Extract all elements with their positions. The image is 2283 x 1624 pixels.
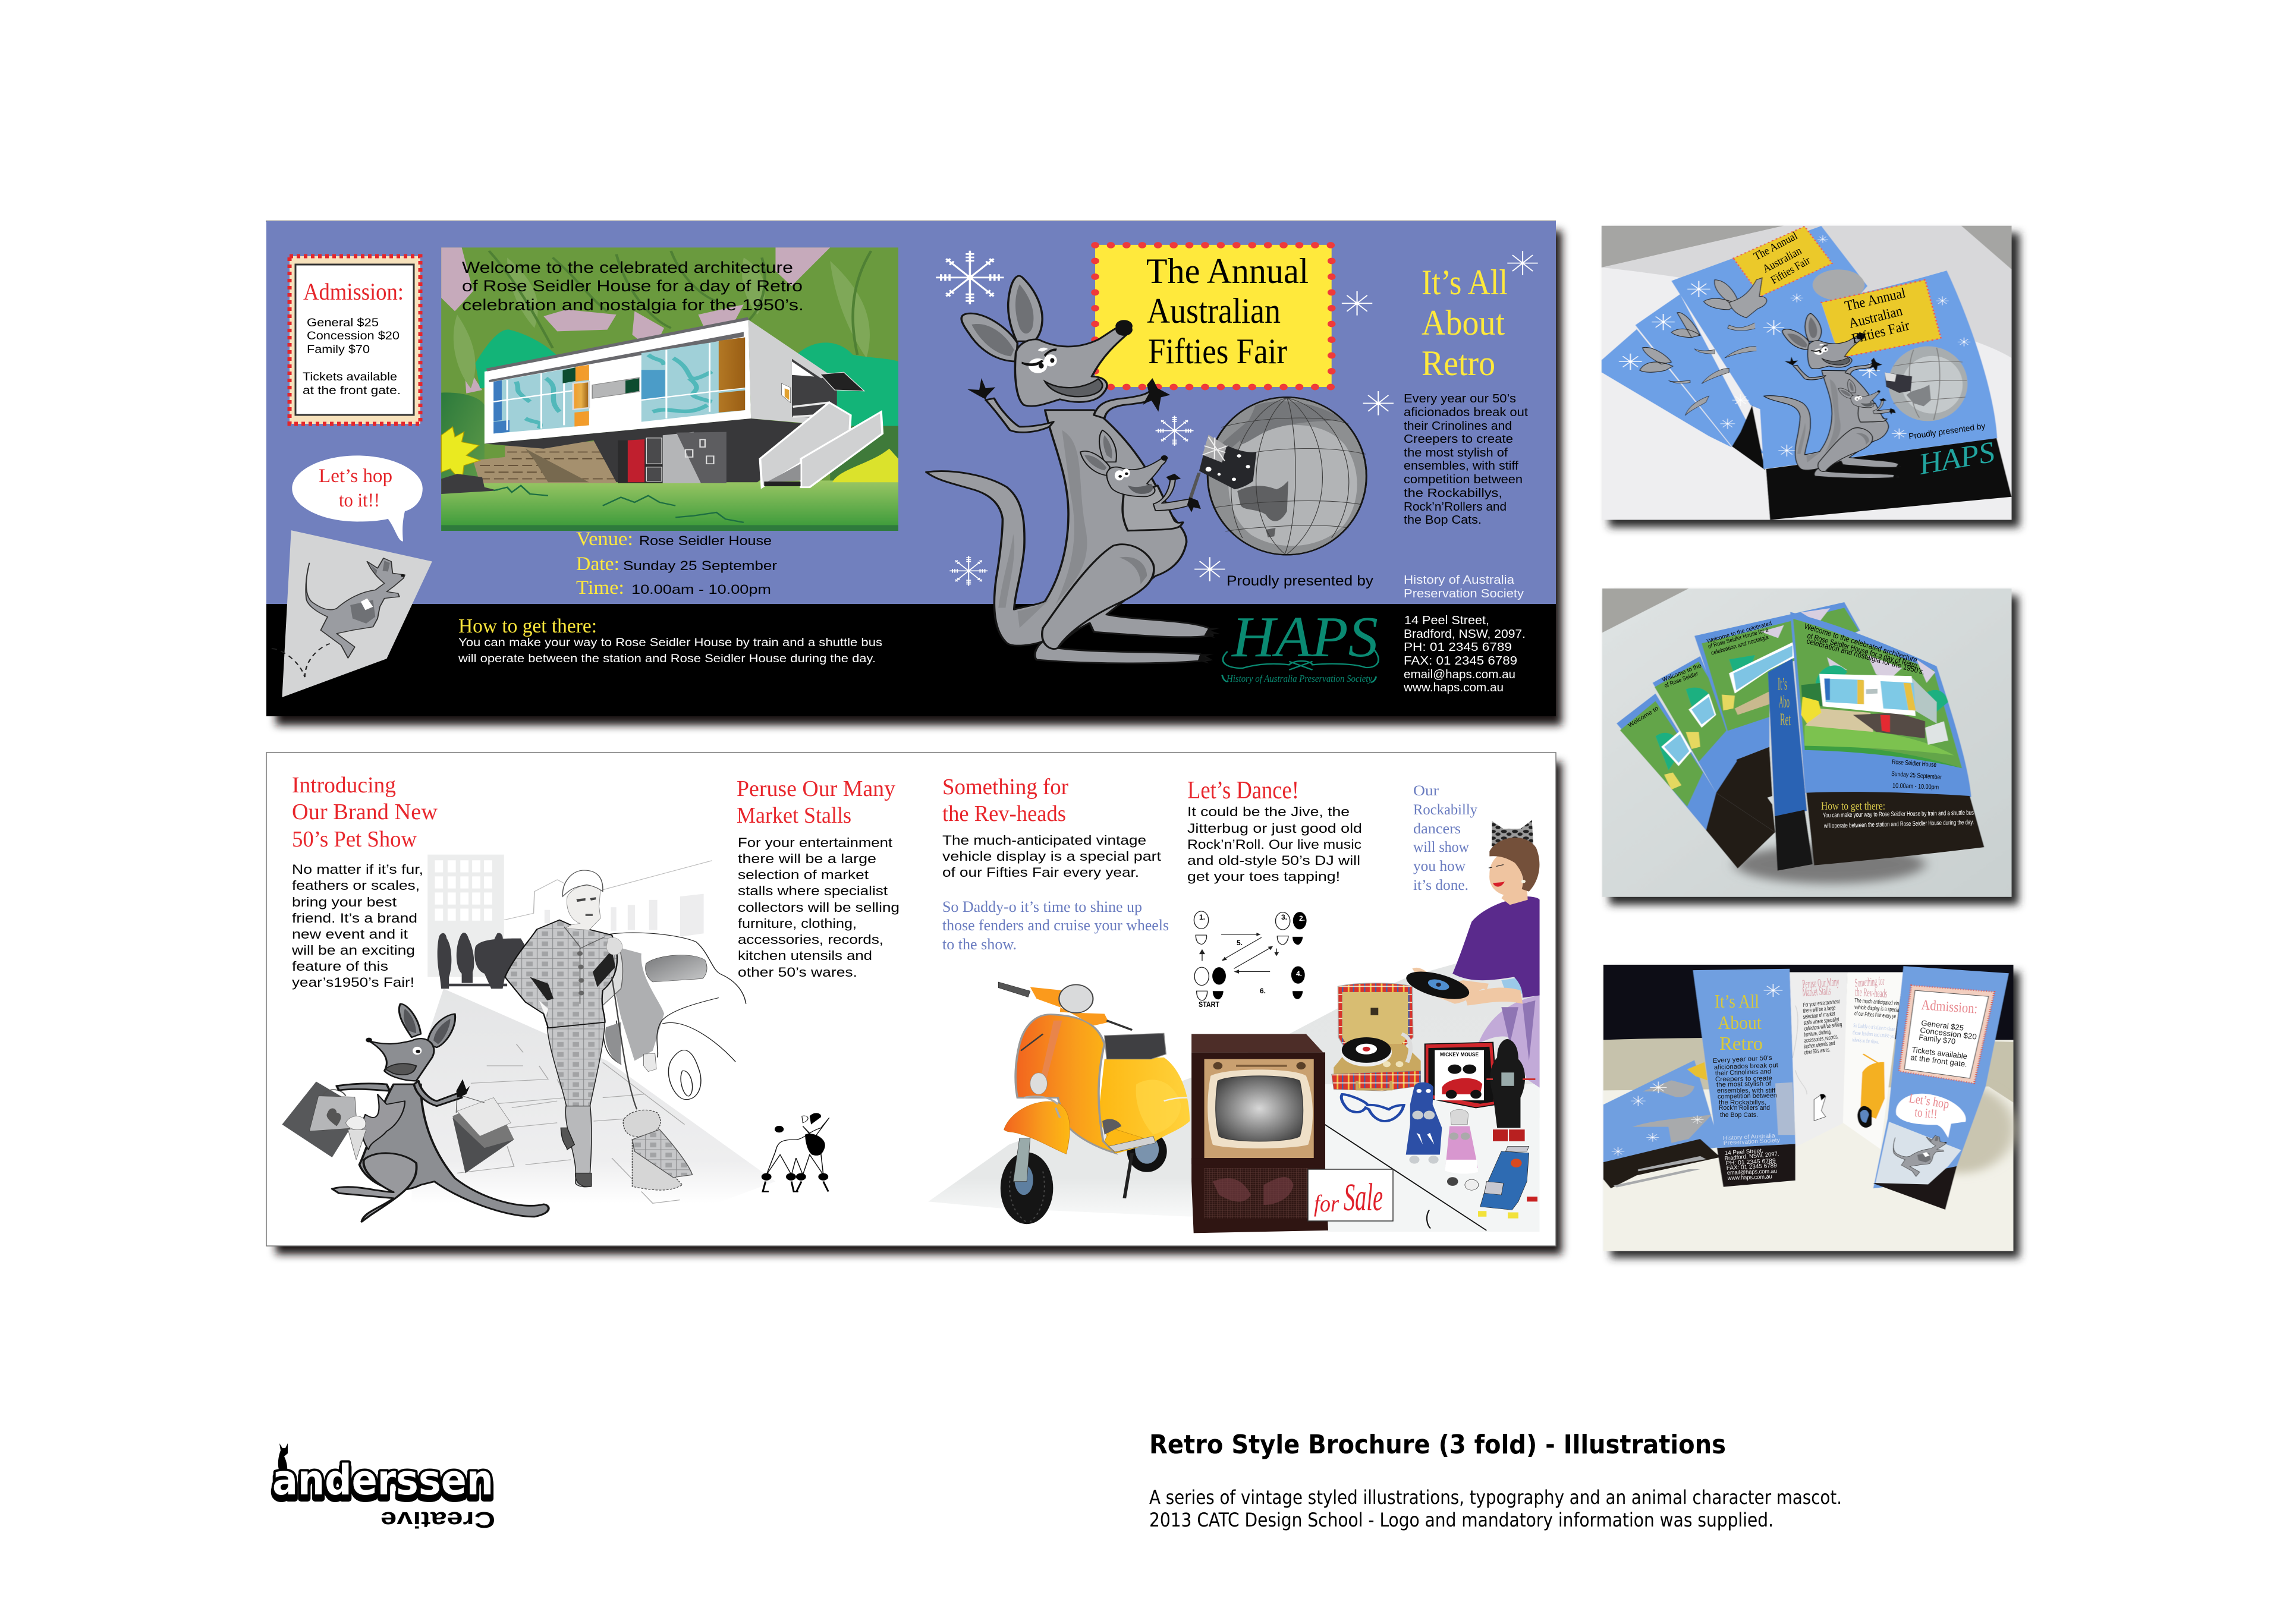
event details: Date: [576, 553, 620, 575]
photo: brochure unfolded standing: accessories, records, [1804, 1034, 1839, 1044]
heading: rev-heads: the Rev-heads [942, 801, 1066, 826]
blue note: daddy-o: those fenders and cruise your wheels [942, 917, 1169, 934]
paragraph: every year: the most stylish of [1404, 446, 1508, 459]
paragraph: every year: ensembles, with stiff [1404, 459, 1518, 473]
admission ticket [290, 256, 420, 424]
dance step diagram: 2. [1299, 914, 1305, 923]
photo: brochure unfolded standing: kitchen utensils and [1804, 1040, 1835, 1050]
blue note: rockabilly dancers: it’s done. [1413, 877, 1468, 893]
paragraph: market stalls: there will be a large [738, 851, 876, 866]
paragraph: market stalls [738, 835, 900, 980]
admission ticket: Admission: [303, 278, 404, 305]
photo: brochure unfolded standing: there will be a large [1803, 1005, 1836, 1015]
paragraph: market stalls: accessories, records, [738, 932, 883, 947]
photo: brochure unfolded standing: competition between [1718, 1092, 1777, 1100]
paragraph: market stalls: For your entertainment [738, 835, 892, 850]
photo: brochure unfolded standing: their Crinolines and [1715, 1068, 1771, 1077]
paragraph: pet show [291, 862, 423, 990]
speech bubble: Let’s hop [319, 465, 392, 487]
illustration: yellow scooter [998, 982, 1190, 1224]
for sale sign: Sale [1344, 1176, 1383, 1219]
photo: brochure unfolded standing: the Bop Cats. [1720, 1112, 1758, 1119]
event details: Rose Seidler House [639, 533, 772, 548]
for sale sign: for [1314, 1190, 1339, 1217]
photo: brochure unfolded standing: the most stylish of [1716, 1080, 1772, 1088]
paragraph: let's dance [1187, 804, 1362, 884]
how to get there: How to get there: [458, 615, 597, 637]
mascot kangaroo [926, 276, 1221, 663]
photo: brochure unfolded standing: the Rev-heads [1855, 986, 1888, 1000]
admission ticket: Family $70 [307, 344, 370, 356]
photo: brochures with Rose Seidler House cover: 10.00am - 10.00pm [1892, 782, 1939, 791]
paragraph: let's dance: get your toes tapping! [1187, 869, 1340, 884]
photo: brochure unfolded standing: ensembles, with stiff [1717, 1087, 1776, 1094]
photo: brochure unfolded standing: wheels to the show. [1852, 1037, 1879, 1046]
event details: Venue: [576, 528, 633, 550]
address [1403, 614, 1526, 694]
photo: brochures with Rose Seidler House cover: How to get there: [1821, 800, 1885, 813]
admission ticket: Tickets available [303, 371, 397, 383]
paragraph: pet show: No matter if it’s fur, [292, 862, 423, 877]
photo: brochure covers fanned: The Annual [1844, 285, 1907, 314]
address: FAX: 01 2345 6789 [1404, 654, 1517, 668]
paragraph: rev-heads: of our Fifties Fair every year. [942, 865, 1139, 880]
snowflakes [936, 251, 1538, 586]
address: 14 Peel Street, [1404, 614, 1489, 627]
photo: brochure unfolded standing: Something for [1854, 975, 1885, 990]
event details: 10.00am - 10.00pm [631, 582, 771, 597]
logo: HAPS: History of Australia Preservation Society [1226, 673, 1372, 684]
society name: History of Australia [1404, 574, 1515, 587]
blue note: daddy-o [942, 898, 1169, 953]
photo: brochures with Rose Seidler House cover: will operate between the station and Rose Seidler House during the day. [1823, 819, 1974, 830]
event details: Sunday 25 September [623, 558, 777, 573]
dance step diagram: 5. [1237, 939, 1243, 947]
photo: brochure unfolded standing: aficionados break out [1714, 1062, 1778, 1071]
illustration: rockabilly woman with record [1402, 820, 1540, 1088]
dance step diagram [1194, 911, 1307, 1009]
photo: brochure unfolded standing: those fenders and cruise yo [1853, 1030, 1894, 1040]
illustration: record player [1332, 983, 1421, 1091]
paragraph: every year: their Crinolines and [1404, 420, 1512, 433]
paragraph: let's dance: and old-style 50’s DJ will [1187, 853, 1360, 868]
heading: let's dance: Let’s Dance! [1187, 777, 1299, 804]
paragraph: every year: Rock’n’Rollers and [1404, 501, 1507, 514]
photo: brochures with Rose Seidler House cover: Welcome to the [1661, 662, 1703, 684]
paragraph: let's dance: Rock’n’Roll. Our live music [1187, 837, 1361, 852]
paragraph: market stalls: selection of market [738, 867, 869, 882]
illustration: vintage television [1191, 1034, 1328, 1233]
photo: brochure unfolded standing: stalls where specialist [1803, 1016, 1839, 1027]
illustration: Rose Seidler House: Welcome to the celebrated architecture [462, 259, 793, 276]
photo: brochure unfolded standing: Market Stalls [1802, 984, 1831, 999]
paragraph: market stalls: kitchen utensils and [738, 948, 872, 963]
paragraph: rev-heads [942, 833, 1161, 880]
address: Bradford, NSW, 2097. [1404, 628, 1526, 641]
paragraph: pet show: year’s1950’s Fair! [292, 975, 414, 990]
photo: brochures with Rose Seidler House cover: Welcome to the celebrated architecture [1803, 622, 1919, 665]
speech bubble: to it!! [339, 490, 380, 511]
photo: brochure unfolded standing: furniture, clothing, [1804, 1028, 1832, 1038]
kangaroo shopping [282, 1004, 549, 1222]
paragraph: market stalls: furniture, clothing, [738, 916, 857, 931]
paragraph: pet show: will be an exciting [291, 943, 415, 958]
proudly presented by: Proudly presented by [1227, 573, 1373, 589]
heading: pet show: Our Brand New [292, 800, 438, 824]
paragraph: every year: aficionados break out [1404, 406, 1528, 419]
photo: brochure unfolded standing: Every year our 50’s [1713, 1055, 1773, 1065]
blue note: rockabilly dancers: dancers [1413, 821, 1461, 837]
paragraph: every year: the Rockabillys, [1404, 487, 1502, 500]
heading: market stalls [737, 776, 895, 828]
for sale sign [1308, 1169, 1393, 1221]
text: It's All About Retro [1422, 263, 1508, 383]
photo: brochure unfolded standing: PH: 01 2345 6789 [1726, 1158, 1776, 1167]
logo: anderssen Creative: anderssen [272, 1460, 493, 1509]
blue note: rockabilly dancers: Our [1413, 783, 1439, 799]
heading: pet show: Introducing [292, 773, 396, 798]
photo: brochures with Rose Seidler House cover: Welcome to [1627, 705, 1660, 729]
admission ticket: Concession $20 [307, 330, 400, 342]
photo: brochure unfolded standing: other 50’s wares. [1804, 1047, 1831, 1056]
logo: anderssen Creative: Creative [380, 1507, 495, 1532]
photo: brochures with Rose Seidler House cover: Ret [1780, 710, 1791, 729]
shadow: photo 1 [1609, 233, 2020, 527]
photo: brochure unfolded standing: Concession $20 [1920, 1025, 1977, 1041]
photo: brochure unfolded standing: Preservation Society [1724, 1137, 1780, 1147]
globe with Australian flag [1188, 397, 1366, 555]
photo: brochure unfolded standing: Rock’n’Rollers and [1719, 1104, 1770, 1112]
photo: brochures with Rose Seidler House cover: celebration and nostalgia for the 1950’s. [1806, 636, 1926, 676]
logo: anderssen Creative [272, 1443, 495, 1532]
shadow: photo 2 [1609, 596, 2018, 905]
shadow: photo 3 [1611, 972, 2020, 1258]
photo: brochure covers fanned: Fifties Fair [1769, 254, 1813, 287]
photo: brochure unfolded standing: Retro [1719, 1033, 1763, 1054]
photo: brochure unfolded standing: History of Australia [1723, 1132, 1775, 1142]
photo: brochure unfolded standing: Admission: [1921, 997, 1978, 1017]
title box: The Annual Australian Fifties Fair: Fifties Fair [1148, 332, 1287, 371]
logo: anderssen Creative: anderssen [272, 1456, 493, 1505]
heading: pet show: 50’s Pet Show [292, 827, 417, 852]
paragraph: pet show: feathers or scales, [292, 878, 420, 893]
dance step diagram: 6. [1260, 987, 1266, 995]
paragraph: every year: Creepers to create [1404, 433, 1513, 446]
photo: brochure unfolded standing: General $25 [1921, 1018, 1964, 1033]
photo: brochures with Rose Seidler House cover: of Rose Seidler [1663, 671, 1700, 690]
illustration: Rose Seidler House: celebration and nostalgia for the 1950’s. [462, 296, 804, 314]
photo: brochures with Rose Seidler House cover: You can make your way to Rose Seidler House by train and a shuttle bus [1823, 810, 1974, 819]
how to get there [458, 615, 882, 665]
illustration: lunch box and toy robots: MICKEY MOUSE [1440, 1052, 1479, 1058]
panel shadow: front of brochure [276, 231, 1562, 725]
dance step diagram: 4. [1296, 970, 1302, 978]
photo: brochure unfolded standing: For your entertainment [1803, 999, 1840, 1009]
blue note: rockabilly dancers [1413, 783, 1477, 893]
how to get there: You can make your way to Rose Seidler House by train and a shuttle bus [458, 637, 882, 649]
photo: brochures with Rose Seidler House cover: celebration and nostalgia [1710, 634, 1769, 657]
photo: brochure covers fanned: The Annual [1751, 229, 1800, 263]
event details: Time: [576, 577, 624, 599]
paragraph: market stalls: collectors will be selling [738, 900, 900, 915]
photo: brochure unfolded standing: Tickets available [1911, 1045, 1968, 1060]
paragraph: every year [1404, 392, 1528, 527]
photo: brochures with Rose Seidler House cover: Rose Seidler House [1892, 759, 1936, 769]
text: It's All About Retro: Retro [1422, 344, 1495, 383]
photo: brochure covers fanned: Australian [1847, 303, 1904, 332]
paragraph: every year: Every year our 50’s [1404, 392, 1516, 405]
illustration: lunch box and toy robots [1341, 1039, 1537, 1219]
blue note: rockabilly dancers: you how [1413, 858, 1466, 874]
photo: brochure unfolded standing: About [1718, 1012, 1762, 1033]
photo: brochure unfolded standing: email@haps.com.au [1727, 1168, 1777, 1176]
photo: brochure unfolded standing: Peruse Our Many [1802, 975, 1839, 991]
paragraph: market stalls: other 50’s wares. [738, 965, 857, 980]
text: It's All About Retro: About [1422, 303, 1505, 342]
paragraph: pet show: new event and it [292, 927, 408, 942]
photo: brochures with Rose Seidler House cover [1602, 588, 2012, 897]
photo: brochures with Rose Seidler House cover: of Rose Seidler House for a day of Retro [1806, 631, 1918, 670]
text: It's All About Retro: It’s All [1422, 263, 1508, 302]
paragraph: rev-heads: vehicle display is a special part [942, 849, 1161, 864]
panel: brochure inside spread [266, 753, 1556, 1246]
title box: The Annual Australian Fifties Fair [1095, 245, 1332, 387]
panel shadow: inside of brochure [276, 762, 1562, 1254]
panel background blue [266, 221, 1556, 605]
photo: brochure unfolded standing [1603, 965, 2014, 1251]
speech bubble [292, 455, 423, 542]
photo: brochure unfolded standing: So Daddy-o it’s time to shine [1853, 1022, 1895, 1033]
admission ticket: General $25 [307, 317, 379, 329]
logo: HAPS: HAPS [1231, 605, 1378, 669]
photo: brochure unfolded standing: The much-anticipated vin [1854, 997, 1899, 1007]
event details [576, 528, 777, 599]
title box: The Annual Australian Fifties Fair: Australian [1147, 291, 1281, 331]
photo: brochures with Rose Seidler House cover: It’s [1778, 674, 1787, 694]
society name: Preservation Society [1404, 587, 1524, 600]
photo: brochure unfolded standing: FAX: 01 2345 6789 [1727, 1163, 1777, 1172]
dance step diagram: 1. [1199, 913, 1205, 921]
admission ticket: at the front gate. [303, 385, 401, 397]
paragraph: every year: competition between [1404, 473, 1523, 486]
caption description: 2013 CATC Design School - Logo and mandatory information was supplied. [1149, 1509, 1773, 1531]
how to get there: will operate between the station and Rose Seidler House during the day. [458, 653, 876, 665]
photo: brochure unfolded standing: selection of market [1803, 1011, 1835, 1021]
heading: pet show [292, 773, 438, 852]
heading: market stalls: Market Stalls [737, 803, 851, 828]
caption description [1149, 1486, 1842, 1531]
address: email@haps.com.au [1404, 668, 1515, 681]
caption title: Retro Style Brochure (3 fold) - Illustrations [1149, 1430, 1726, 1460]
photo: brochure unfolded standing: at the front gate. [1910, 1053, 1968, 1069]
photo: brochure unfolded standing: collectors will be selling [1804, 1021, 1842, 1033]
photo: brochure covers fanned: Fifties Fair [1850, 318, 1911, 347]
photo: brochure unfolded standing: It’s All [1715, 990, 1759, 1012]
paragraph: market stalls: stalls where specialist [738, 883, 888, 898]
caption description: A series of vintage styled illustrations, typography and an animal character mascot. [1149, 1486, 1842, 1509]
photo: brochure unfolded standing: to it!! [1914, 1104, 1938, 1121]
society name [1404, 574, 1524, 600]
photo: brochure covers fanned [1602, 226, 2012, 520]
paragraph: pet show: feature of this [292, 959, 388, 974]
heading: market stalls: Peruse Our Many [737, 776, 895, 801]
photo: brochures with Rose Seidler House cover: Welcome to the celebrated [1706, 620, 1772, 645]
blue note: rockabilly dancers: Rockabilly [1413, 802, 1477, 818]
photo: brochures with Rose Seidler House cover: of Rose Seidler House for a [1707, 627, 1769, 650]
paragraph: rev-heads: The much-anticipated vintage [942, 833, 1146, 848]
photo: brochure covers fanned: Australian [1760, 244, 1804, 275]
black footer band [266, 604, 1556, 716]
photo: brochure unfolded standing: the Rockabillys, [1719, 1099, 1766, 1106]
panel: brochure outside spread [266, 221, 1556, 716]
photo: brochure unfolded standing: www.haps.com.au [1727, 1173, 1772, 1182]
photo: brochure unfolded standing: Let’s hop [1908, 1090, 1950, 1112]
paragraph: let's dance: Jitterbug or just good old [1187, 821, 1362, 836]
photo: brochure unfolded standing: Family $70 [1919, 1033, 1956, 1046]
photo: brochure covers fanned: Proudly presented by [1908, 421, 1986, 441]
illustration: street scene with lady and poodle [411, 855, 829, 1203]
hopping kangaroo card [272, 530, 432, 697]
heading: rev-heads: Something for [942, 775, 1068, 800]
paragraph: pet show: friend. It’s a brand [292, 911, 417, 926]
paragraph: every year: the Bop Cats. [1404, 514, 1482, 527]
photo: brochure unfolded standing: Bradford, NSW, 2097. [1724, 1151, 1779, 1162]
dance step diagram: 3. [1281, 913, 1287, 921]
blue note: rockabilly dancers: will show [1413, 839, 1469, 855]
blue note: daddy-o: So Daddy-o it’s time to shine up [942, 898, 1142, 915]
paragraph: let's dance: It could be the Jive, the [1187, 804, 1350, 819]
photo: brochure covers fanned: HAPS [1916, 435, 1997, 481]
blue note: daddy-o: to the show. [942, 936, 1017, 953]
heading: rev-heads [942, 775, 1068, 826]
title box: The Annual Australian Fifties Fair: The Annual [1146, 251, 1309, 291]
photo: brochures with Rose Seidler House cover: Abo [1779, 692, 1790, 712]
photo: brochure unfolded standing: Creepers to create [1715, 1075, 1772, 1083]
photo: brochures with Rose Seidler House cover: Sunday 25 September [1891, 770, 1942, 781]
photo: brochure unfolded standing: of our Fifties Fair every ye [1854, 1011, 1897, 1020]
illustration: Rose Seidler House: of Rose Seidler House for a day of Retro [462, 277, 803, 295]
address: www.haps.com.au [1403, 681, 1504, 694]
address: PH: 01 2345 6789 [1404, 641, 1512, 654]
paragraph: pet show: bring your best [292, 895, 397, 909]
table shadow [928, 957, 1540, 1232]
photo: brochure unfolded standing: vehicle display is a specia [1854, 1004, 1900, 1014]
illustration: Rose Seidler House [441, 247, 898, 531]
dance step diagram: START [1199, 1000, 1219, 1009]
photo: brochure unfolded standing: 14 Peel Street, [1724, 1147, 1763, 1157]
